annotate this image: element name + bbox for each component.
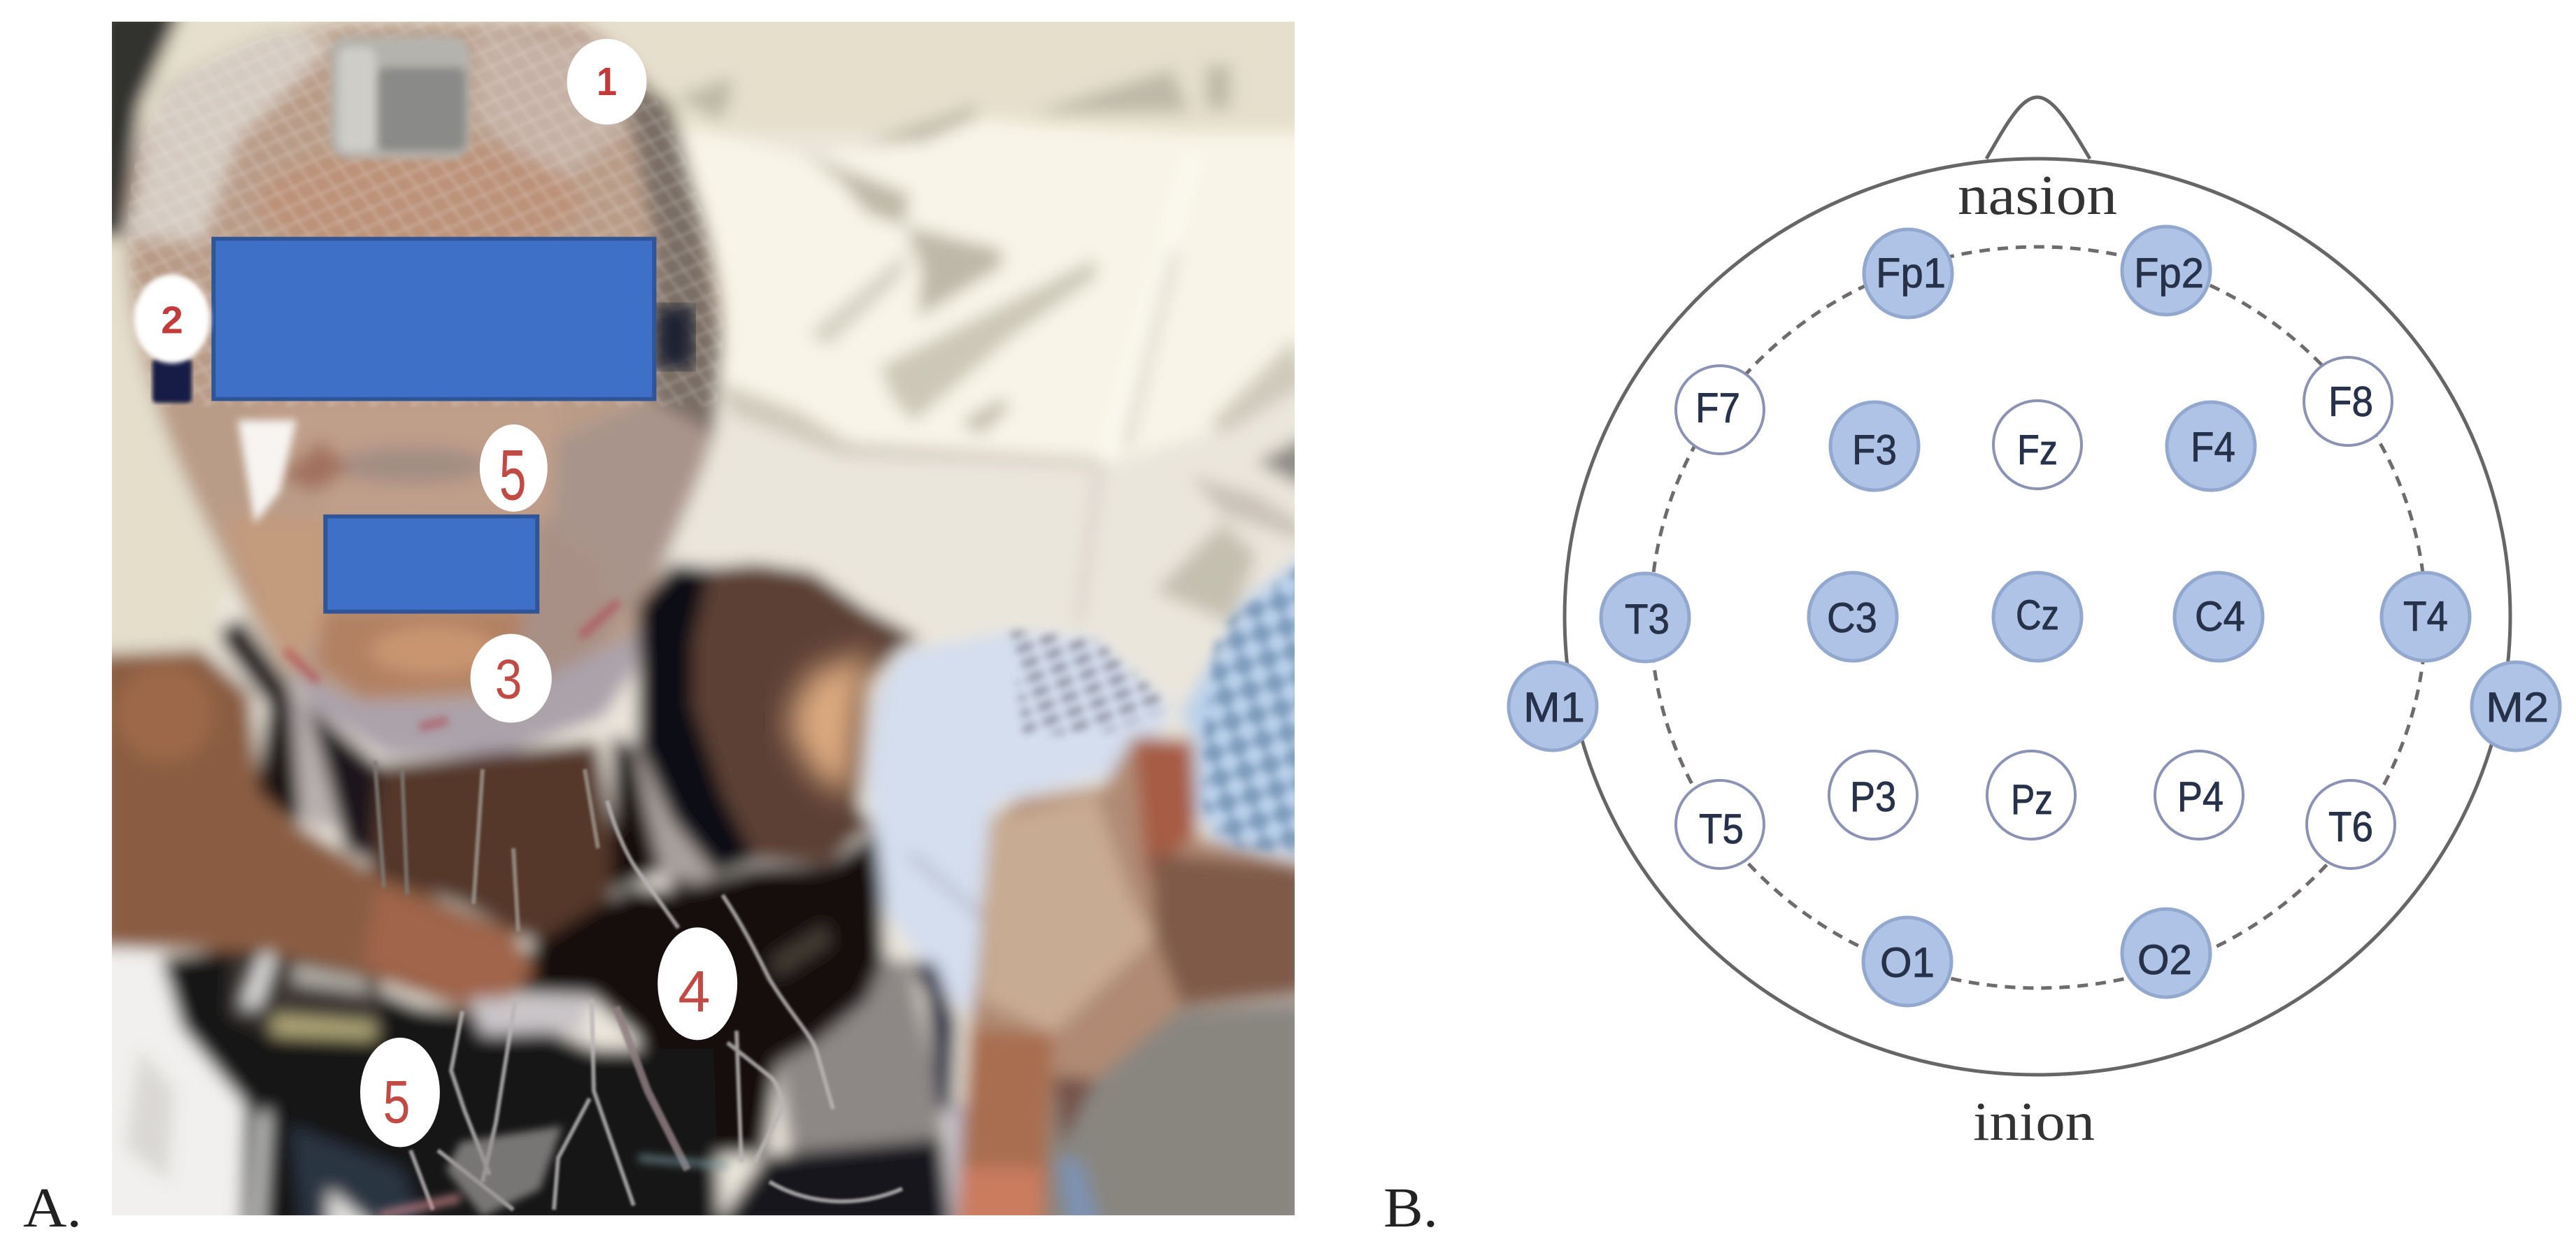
left arm	[98, 650, 536, 1011]
mitten check pattern	[1203, 559, 1308, 857]
callout 2	[134, 275, 211, 364]
electrode labels: P4	[2177, 773, 2223, 820]
white shirt left	[98, 944, 245, 1231]
callout 1	[567, 39, 647, 124]
collar and straps	[638, 564, 757, 891]
electrode labels: F7	[1695, 385, 1740, 431]
sleeve	[862, 631, 1172, 1017]
white band below arm	[469, 995, 590, 1035]
left strap	[219, 618, 304, 824]
electrodes: unhighlighted	[1676, 357, 2395, 868]
sleeve net dots	[1011, 631, 1172, 736]
grey bedding lower right	[1035, 1000, 1308, 1231]
electrode labels: O2	[2137, 936, 2192, 983]
electrode labels: T3	[1625, 596, 1670, 643]
dark shirt	[161, 944, 720, 1231]
head outline with nose	[1565, 97, 2510, 1075]
net overlay on head	[112, 14, 741, 406]
callout 4	[657, 927, 737, 1040]
blue mitten	[1181, 552, 1308, 857]
electrode labels: C4	[2195, 593, 2245, 640]
right hand	[956, 736, 1308, 1231]
callout 3	[470, 634, 552, 723]
left background and dark corner	[112, 22, 189, 249]
soft highlight on right arm	[790, 650, 874, 797]
photo annotations layer	[134, 39, 737, 1147]
electrode labels: Fp2	[2134, 250, 2204, 296]
electrode labels: T5	[1699, 806, 1744, 852]
electrode labels: C3	[1827, 594, 1877, 641]
dark ear sensor	[152, 359, 192, 403]
electrode labels: Cz	[2016, 592, 2059, 638]
electrode labels: Fp1	[1876, 250, 1946, 296]
callout 5 upper: 5	[499, 436, 526, 515]
grey shirt patch	[778, 958, 943, 1155]
dashed electrode ring	[1651, 247, 2426, 988]
electrode labels: T4	[2403, 593, 2448, 640]
right upper arm	[693, 564, 922, 866]
electrode labels: Pz	[2011, 776, 2053, 823]
electrode labels: T6	[2328, 803, 2373, 850]
callout 5 lower	[360, 1038, 440, 1147]
white cheek tape	[238, 420, 297, 524]
redaction box: mouth	[325, 517, 537, 612]
electrode labels: M1	[1523, 684, 1585, 731]
callout 4: 4	[678, 959, 710, 1024]
label A: A.	[23, 1178, 82, 1239]
icon: forehead electrode patch	[330, 36, 470, 159]
callout 5 upper	[480, 424, 548, 515]
callout 3: 3	[495, 649, 522, 710]
callout 1: 1	[597, 60, 617, 104]
electrode labels	[1523, 250, 2549, 986]
electrode labels: M2	[2486, 684, 2549, 731]
heading: nasion: nasion	[1958, 165, 2117, 227]
electrode labels: O1	[1880, 939, 1935, 986]
neck net band	[292, 626, 657, 766]
callout 2: 2	[161, 299, 183, 341]
panel B: 10-20 electrode head map	[1509, 97, 2560, 1152]
wire tangle highlights	[380, 1126, 727, 1217]
electrode labels: P3	[1850, 773, 1896, 820]
buckle	[228, 952, 380, 1039]
electrode labels: F4	[2191, 424, 2235, 471]
navy cable strap	[909, 962, 956, 1113]
pillow folds	[676, 65, 1308, 623]
label B: B.	[1383, 1178, 1438, 1239]
net red stitching	[285, 601, 619, 727]
chest	[371, 741, 616, 944]
wires bundle	[375, 761, 902, 1210]
electrode labels: Fz	[2017, 427, 2058, 473]
redaction box: eyes	[213, 238, 654, 399]
head	[127, 22, 723, 757]
heading: inion: inion	[1973, 1091, 2095, 1152]
electrode labels: F8	[2328, 378, 2373, 425]
electrodes: highlighted	[1509, 227, 2560, 1006]
callout 5 lower: 5	[383, 1068, 410, 1136]
electrode labels: F3	[1852, 427, 1897, 473]
